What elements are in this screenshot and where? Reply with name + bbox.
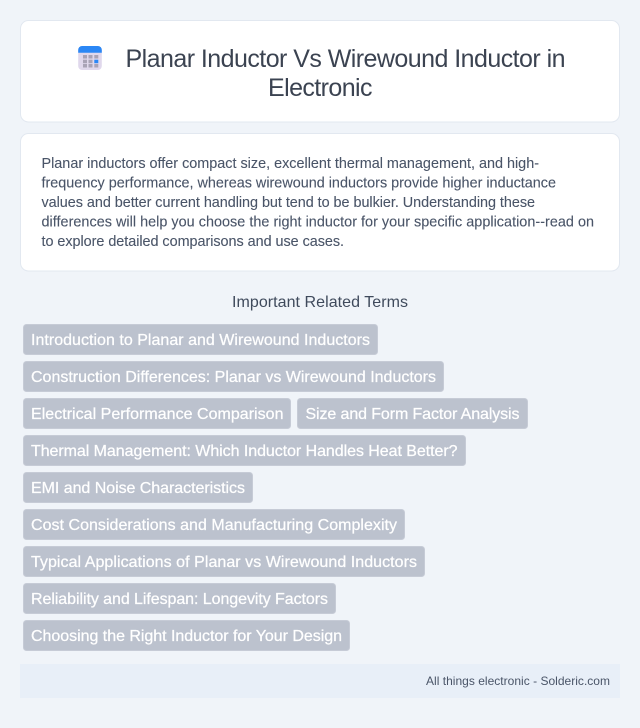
panel: introduction xyxy=(20,134,620,271)
text block: introduction: frequency performance, whereas wirewound inductors provide higher inductance xyxy=(42,176,556,192)
text block: introduction: values and better current handling but tend to be bulkier. Understanding these xyxy=(42,195,535,211)
tag: thermal management: Thermal Management: Which Inductor Handles Heat Better? xyxy=(31,443,458,460)
tag: applications: Typical Applications of Planar vs Wirewound Inductors xyxy=(31,554,417,571)
footer: All things electronic - Solderic.com xyxy=(426,674,610,688)
tag: choosing xyxy=(24,620,350,650)
title: Electronic xyxy=(268,74,372,102)
tag: reliability xyxy=(24,584,336,614)
tag: introduction: Introduction to Planar and Wirewound Inductors xyxy=(31,332,370,349)
tag: electrical performance xyxy=(24,398,290,428)
tag: construction: Construction Differences: Planar vs Wirewound Inductors xyxy=(31,369,436,386)
tag: thermal management xyxy=(24,436,466,466)
tag: cost: Cost Considerations and Manufacturing Complexity xyxy=(31,517,397,534)
tag: construction xyxy=(24,362,444,392)
heading: important related terms: Important Related Terms xyxy=(232,294,408,311)
text block: introduction: to explore detailed comparisons and use cases. xyxy=(42,234,344,250)
tag: size and form factor xyxy=(298,398,528,428)
footer xyxy=(20,664,620,698)
text block: introduction: differences will help you choose the right inductor for your specific application--read on xyxy=(42,214,594,230)
tag: applications xyxy=(24,546,424,576)
title: Planar Inductor Vs Wirewound Inductor in xyxy=(126,45,566,73)
tag: cost xyxy=(24,510,404,540)
tag: emi and noise: EMI and Noise Characteristics xyxy=(31,480,245,497)
tag: emi and noise xyxy=(24,472,252,502)
tag: electrical performance: Electrical Performance Comparison xyxy=(31,406,284,423)
text block: introduction: Planar inductors offer compact size, excellent thermal management, and high- xyxy=(42,156,539,172)
icon: calendar xyxy=(78,46,102,70)
tag: reliability: Reliability and Lifespan: Longevity Factors xyxy=(31,591,328,608)
tag: introduction xyxy=(24,324,378,354)
panel: header xyxy=(20,20,620,122)
tag: choosing: Choosing the Right Inductor for Your Design xyxy=(31,628,342,645)
tag: size and form factor: Size and Form Factor Analysis xyxy=(306,406,520,423)
